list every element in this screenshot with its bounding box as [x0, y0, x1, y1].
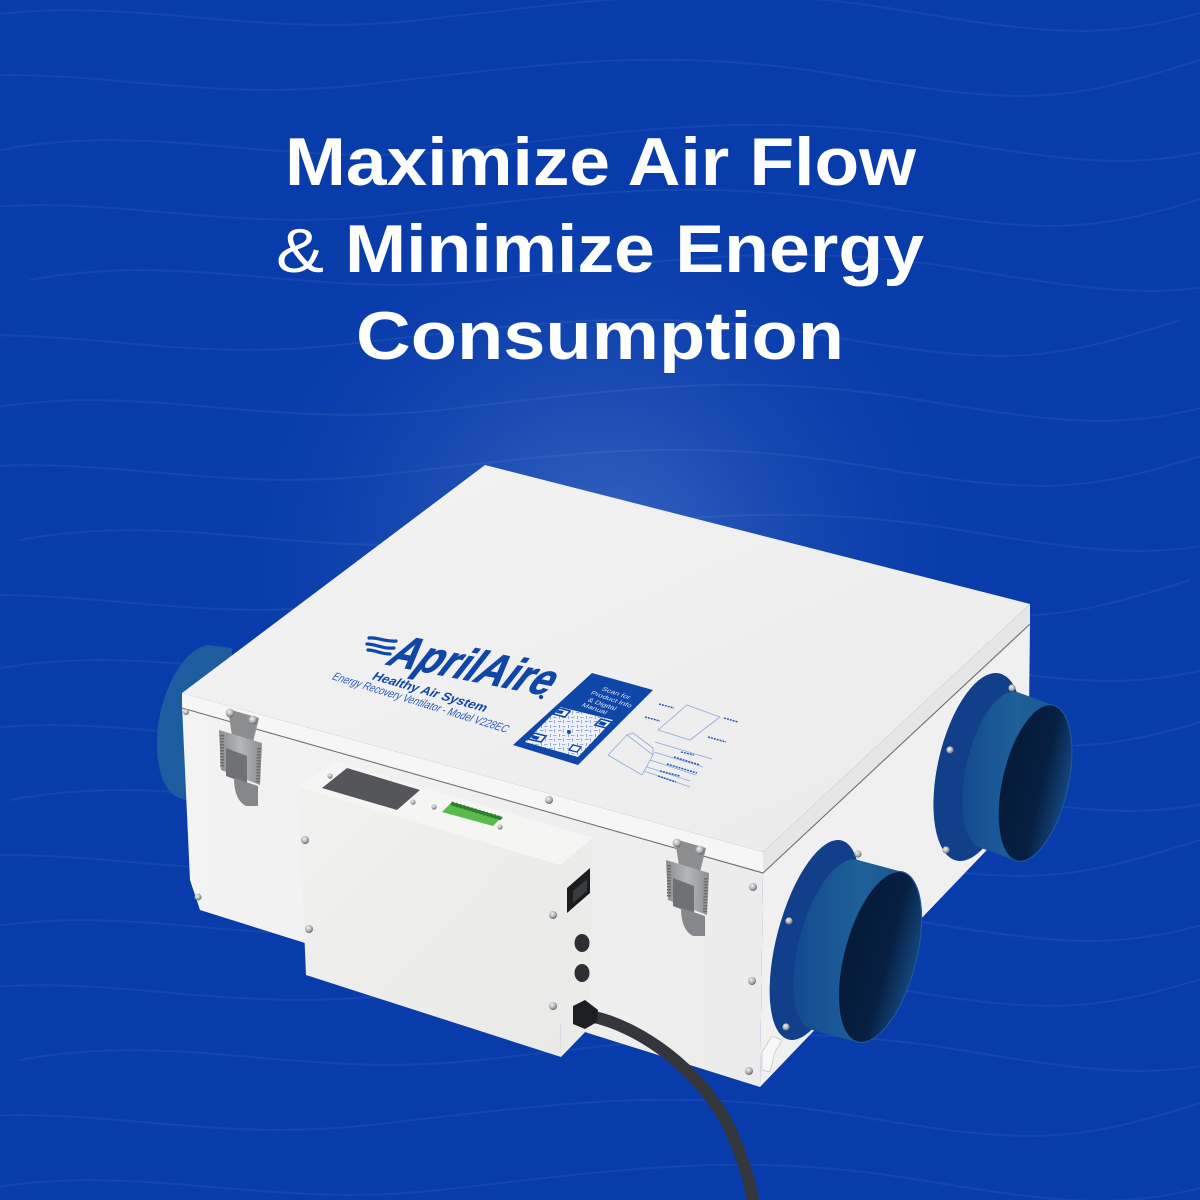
title: & [276, 217, 324, 286]
front face [182, 705, 763, 1087]
box side [560, 838, 593, 1057]
terminal plate [322, 768, 420, 810]
condensate drain [762, 1036, 782, 1072]
knobs [574, 934, 590, 982]
duct front right [752, 831, 938, 1051]
top face [182, 465, 1030, 852]
QR code [525, 707, 613, 757]
lid band [182, 604, 1030, 873]
right side face [760, 622, 1030, 1087]
top label: logo and model [329, 628, 573, 735]
logo wordmark: AprilAire [377, 628, 573, 705]
product name: Healthy Air System [369, 670, 492, 714]
box top [298, 761, 593, 865]
box front [298, 787, 561, 1057]
QR panel [513, 673, 653, 765]
ventilator product [157, 465, 1085, 1200]
QR heading: Manual [580, 701, 610, 716]
QR heading: & Digital [586, 696, 619, 712]
logo swoosh [367, 638, 396, 654]
QR heading: Product Info [589, 689, 634, 709]
model line: Energy Recovery Ventilator - Model V228EC [329, 670, 512, 735]
latch left [219, 709, 262, 806]
electrical control box [298, 761, 593, 1057]
title: Maximize Air Flow [285, 124, 917, 200]
power cable [573, 1000, 754, 1200]
left duct [157, 645, 232, 800]
rocker switch [567, 868, 590, 913]
plug [573, 1000, 598, 1029]
QR heading: Scan for [600, 685, 634, 701]
QR heading [580, 685, 634, 716]
duct rear right [917, 664, 1085, 870]
box screws [301, 773, 557, 1010]
title: Consumption [356, 298, 844, 374]
wiring diagrams [608, 704, 738, 787]
latch right [666, 839, 709, 936]
green terminal block [442, 802, 502, 826]
registered mark [539, 695, 543, 699]
title: Minimize Energy [345, 211, 924, 287]
title [276, 124, 924, 374]
main cabinet [182, 465, 1030, 1087]
cabinet screws [183, 709, 757, 1075]
